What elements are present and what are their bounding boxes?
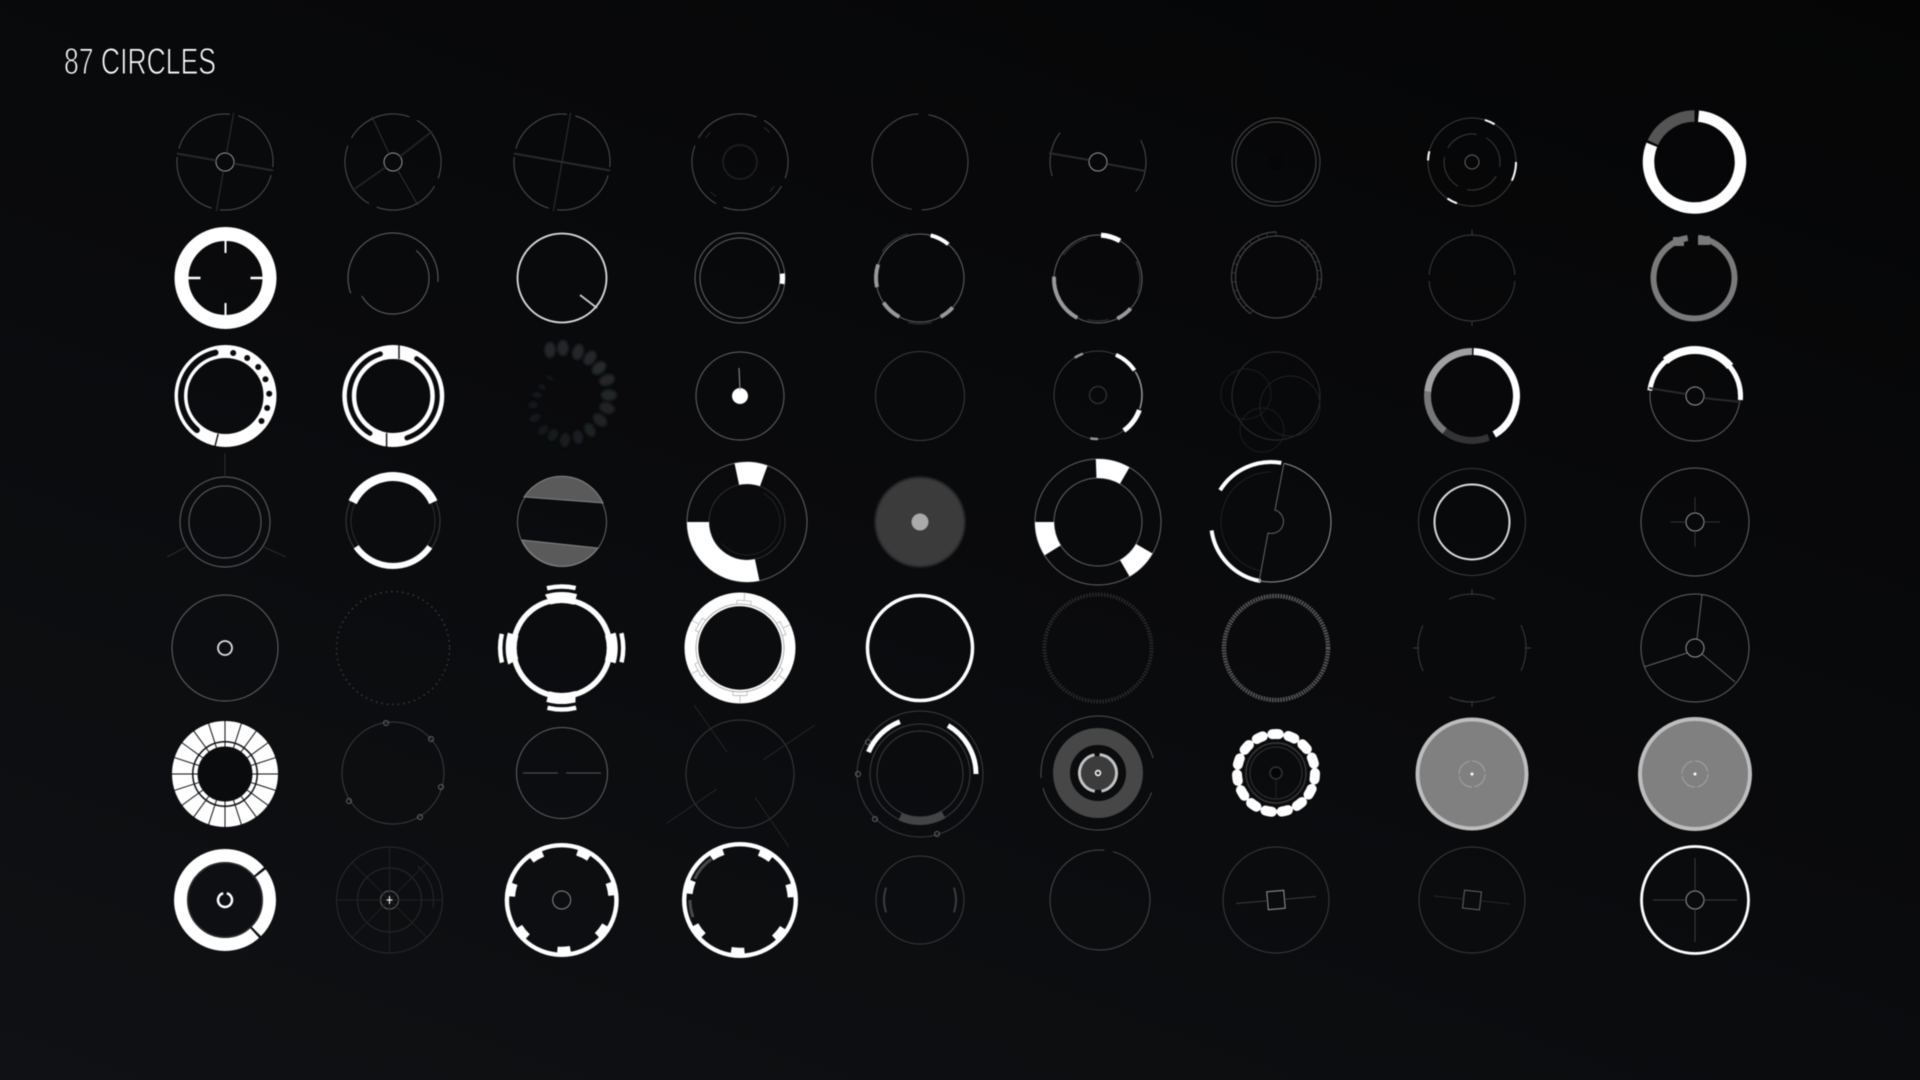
circle r1c2: five spoke arcs — [327, 96, 459, 228]
circle r4c3: banded disc — [518, 476, 606, 566]
circle r2c2: offset arcs — [335, 220, 451, 336]
circle r6c3: ring with dashed diameter — [516, 728, 608, 818]
circle r5c3: ring with four tabs — [488, 574, 636, 722]
circle r1c8: segmented arcs — [1417, 107, 1527, 217]
circle r3c5: dim plain ring — [876, 352, 964, 440]
circle r1c4: arcs with inner ring — [674, 96, 806, 228]
circle r6c2: ring with nodes — [342, 720, 444, 824]
circle r3c9: half ring with centre — [1630, 331, 1760, 461]
circle r2c3: ring with needle — [518, 234, 606, 322]
circle r7c5: dim ring with side ticks — [876, 856, 964, 944]
circle r1c5: plain arcs — [864, 106, 976, 218]
circle r3c7: dim ring with curves — [1221, 352, 1320, 452]
circle r1c7: double ring — [1232, 118, 1320, 206]
circle r3c2: double ring with blocks — [333, 335, 454, 457]
circle r5c8: four arcs with ticks — [1400, 576, 1544, 720]
circle r3c4: dot with needle — [696, 352, 784, 440]
circle r6c6: gray target — [1025, 700, 1171, 846]
circle r6c5: layered rings with arcs — [844, 698, 996, 850]
circle r4c7: dial with split line — [1188, 439, 1354, 605]
circle r2c5: segmented ring A — [856, 214, 984, 342]
circle r4c6: three block ring — [1024, 448, 1172, 596]
circle r2c8: ring with gaps and ticks — [1426, 230, 1518, 326]
circle r2c7: outlined segment ring — [1214, 214, 1339, 340]
circle r2c9: gray open ring — [1649, 233, 1739, 323]
circle r4c9: ring with centre cross — [1641, 468, 1749, 576]
circle r6c9: gray disc large — [1640, 719, 1750, 829]
circle r7c2: dim radar — [328, 838, 451, 962]
circle r2c4: double ring with marker — [693, 231, 787, 325]
circle r3c1: ring with dots — [163, 333, 288, 459]
circle r6c1: spoked wheel — [171, 720, 279, 828]
circle r7c9: white ring with crosshair — [1642, 846, 1748, 954]
circle r6c4: ring with outer struts — [667, 705, 815, 847]
circle r5c7: gray tick ring — [1224, 596, 1328, 700]
circle r6c8: gray disc — [1418, 720, 1526, 828]
circle r1c9: thick progress ring — [1633, 101, 1756, 223]
circle r7c3: notched ring with centre — [491, 829, 632, 971]
circle r5c6: dim tick ring — [1044, 594, 1152, 702]
circle r7c6: plain dim ring — [1039, 839, 1161, 961]
circle r7c4: notched ring — [668, 828, 812, 972]
circle r1c3: open cross — [503, 103, 621, 221]
circle r6c7: white bead ring — [1237, 734, 1315, 812]
circle r5c2: dotted ring — [336, 592, 450, 704]
circle r7c7: ring with square — [1223, 847, 1329, 953]
circle r1c1: crosshair arcs — [166, 103, 284, 221]
circle r4c8: ring within ticked ring — [1418, 468, 1526, 576]
title: 87 CIRCLES — [64, 41, 216, 82]
circle r5c9: three spoke ring — [1641, 594, 1749, 702]
circle r3c3: dim spinner — [528, 340, 617, 447]
circle r2c1: thick ring with ticks — [182, 234, 270, 322]
circle r5c1: ring with small centre — [172, 595, 278, 701]
circle r4c4: wedge blocks ring — [687, 462, 807, 582]
circle r5c5: bold white ring — [868, 596, 972, 700]
circle r1c6: side arcs with centre — [1033, 97, 1163, 227]
circle r4c1: double ring with struts — [167, 453, 286, 567]
circle r4c2: top and bottom arcs — [330, 458, 456, 584]
circle r7c8: ring with square tilted — [1419, 847, 1525, 953]
circle r3c6: ring with right arcs — [1037, 334, 1159, 456]
circle r2c6: segmented ring B — [1036, 217, 1160, 341]
circle r5c4: thick ring with fine notched line — [688, 593, 793, 703]
circle r7c1: thick ring with loader — [162, 837, 288, 963]
circle r3c8: gradient ring — [1410, 334, 1534, 458]
circle r4c5: gray disc with dot — [875, 477, 965, 567]
